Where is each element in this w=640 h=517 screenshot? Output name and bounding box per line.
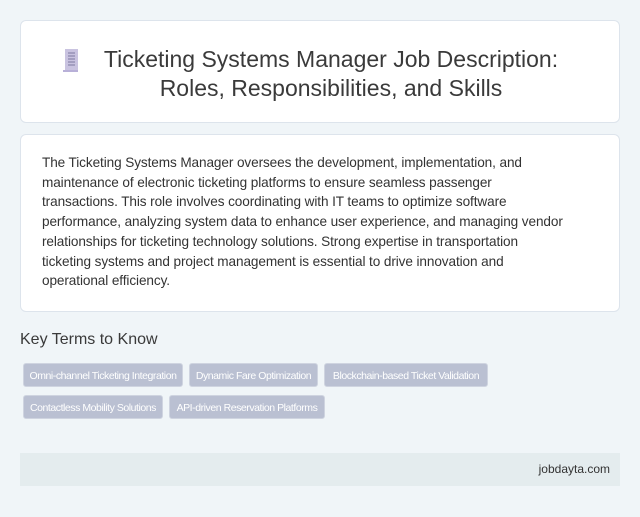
tag 2: Dynamic Fare Optimization <box>196 370 311 382</box>
tag 2 <box>189 363 318 387</box>
description text: ticketing systems and project management is essential to drive innovation and <box>42 254 504 269</box>
tag 1 <box>23 363 183 387</box>
tag 4 <box>23 395 163 419</box>
description text: performance, analyzing system data to enhance user experience, and managing vendor <box>42 214 563 229</box>
description text <box>42 155 563 288</box>
description card <box>20 134 620 312</box>
description text: operational efficiency. <box>42 273 170 288</box>
description text: maintenance of electronic ticketing platforms to ensure seamless passenger <box>42 175 492 190</box>
footer <box>20 453 620 486</box>
tag 5 <box>169 395 325 419</box>
icon: ticket receipt <box>63 49 78 72</box>
heading: key terms: Key Terms to Know <box>20 331 158 348</box>
description text: The Ticketing Systems Manager oversees the development, implementation, and <box>42 155 522 170</box>
tag 1: Omni-channel Ticketing Integration <box>30 370 176 382</box>
description text: transactions. This role involves coordinating with IT teams to optimize software <box>42 194 506 209</box>
description text: relationships for ticketing technology solutions. Strong expertise in transportation <box>42 234 518 249</box>
tag 4: Contactless Mobility Solutions <box>30 402 156 414</box>
header card <box>20 20 620 123</box>
tag 3 <box>324 363 488 387</box>
title: Ticketing Systems Manager Job Description: Roles, Responsibilities, and Skills <box>104 46 558 101</box>
tag 3: Blockchain-based Ticket Validation <box>333 370 479 382</box>
tag 5: API-driven Reservation Platforms <box>177 402 317 414</box>
footer text: jobdayta.com <box>539 462 610 476</box>
